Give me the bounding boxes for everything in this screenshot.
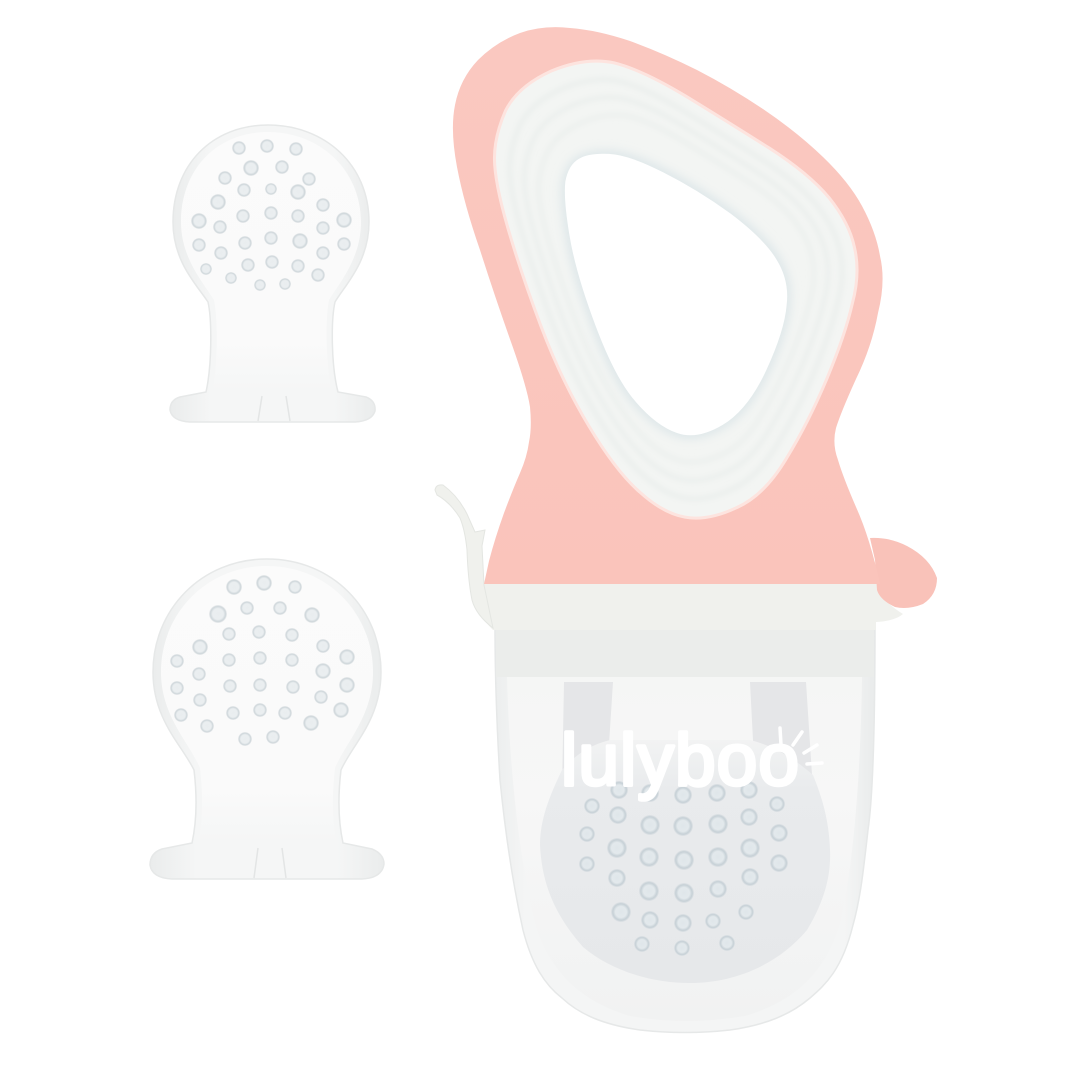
spare teat: bottom xyxy=(150,559,384,879)
teat holes: bottom xyxy=(170,575,355,746)
handle opening xyxy=(565,154,787,435)
spare teat: top xyxy=(170,125,375,422)
teat holes: top xyxy=(191,139,352,291)
handle ring xyxy=(494,61,857,518)
mesh cup xyxy=(495,626,875,1032)
side strap xyxy=(435,485,493,628)
logo sparkle xyxy=(780,728,822,764)
base seam: top xyxy=(258,396,290,421)
inner straps xyxy=(562,682,613,790)
translucent band xyxy=(496,626,874,677)
pink handle xyxy=(453,27,883,584)
logo: lulyboo xyxy=(561,720,799,801)
mesh holes xyxy=(579,781,788,956)
ring ridges xyxy=(510,80,842,499)
ring inner shading xyxy=(566,156,786,433)
inner mesh teat xyxy=(540,740,830,983)
collar xyxy=(470,583,903,630)
base seam: bottom xyxy=(254,848,286,878)
feeder xyxy=(435,27,937,1032)
pink tab xyxy=(870,538,937,608)
